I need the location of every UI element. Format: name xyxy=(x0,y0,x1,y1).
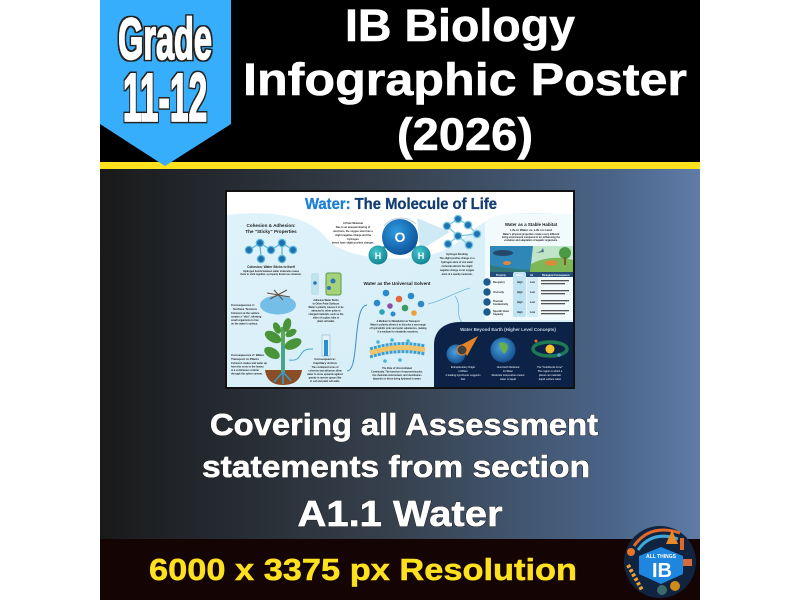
habitat table: High xyxy=(517,281,523,284)
text: hydrogen bonding: molecule attracts the slight xyxy=(442,265,473,268)
section: universal solvent xyxy=(364,281,431,380)
grade range: 11-12 xyxy=(123,59,207,136)
section: water beyond earth: its Water xyxy=(503,370,513,373)
coverage text: statements from section xyxy=(202,449,590,484)
title: Infographic Poster xyxy=(243,54,687,105)
icon: adhesion tube and cell xyxy=(311,273,341,295)
habitat table: Low xyxy=(530,291,535,294)
habitat table: Low xyxy=(530,311,535,314)
section: consequences and plant: from the roots to the leaves xyxy=(231,366,264,368)
habitat table: Conductivity xyxy=(493,303,509,306)
section: stable habitat xyxy=(483,214,573,320)
habitat table: High xyxy=(517,311,523,314)
icon: solvent molecules xyxy=(374,290,424,316)
habitat scene xyxy=(490,246,573,273)
section: consequences and plant: Adhesive Water Sticks xyxy=(313,299,339,302)
habitat table: Viscosity xyxy=(493,291,505,294)
section: consequences and plant: plant cell walls. xyxy=(317,320,335,323)
section: cohesion and adhesion: The "Sticky" Properties xyxy=(245,229,297,234)
section: water beyond earth: planet can maintain xyxy=(539,374,562,377)
icon: membrane xyxy=(370,338,425,363)
grade label: Grade xyxy=(118,6,212,71)
text: a polar molecule: hydrogen xyxy=(347,238,359,241)
section: water beyond earth: Extraplanetary Origin xyxy=(451,366,476,369)
section: water beyond earth xyxy=(434,322,573,387)
text: a polar molecule: A Polar Molecule xyxy=(343,222,364,225)
text: hydrogen bonding: negative charge on an oxygen xyxy=(440,269,475,272)
section: consequences and plant: small organisms to live xyxy=(231,319,259,322)
habitat table xyxy=(483,272,573,317)
section: water beyond earth: water is liquid xyxy=(500,378,517,381)
section: water beyond earth: that xyxy=(461,378,465,381)
section: consequences and plant: The combined forces of xyxy=(312,366,339,369)
habitat table: Thermal xyxy=(493,300,503,303)
icon: hydrogen bonded cluster xyxy=(443,215,481,249)
coverage text xyxy=(202,407,598,534)
section: universal solvent: the chemical environment, and membranes xyxy=(372,374,422,377)
yellow divider xyxy=(100,162,700,169)
section: water beyond earth: The region in which a xyxy=(538,370,563,373)
habitat table: Capacity xyxy=(493,313,504,316)
text: hydrogen bonding: hydrogen atom of one water xyxy=(441,261,473,264)
text: a polar molecule xyxy=(332,222,374,244)
section: universal solvent: Community. The function of macromolecules, xyxy=(371,370,423,374)
section: consequences and plant: creates a "skin", allowing xyxy=(231,316,262,318)
arrow: plant to capillary xyxy=(289,349,313,360)
section: cohesion and adhesion: Cohesion: Water Sticks to Itself xyxy=(247,265,296,269)
section: consequences and plant: Transport in Plants xyxy=(231,357,259,361)
section: stable habitat: living environment compared to air, influencing the xyxy=(502,236,561,239)
section: universal solvent: A Medium for Metabolism & Transport xyxy=(376,320,420,323)
section: universal solvent: depends on these being hydrated in water. xyxy=(373,378,422,380)
grade ribbon xyxy=(100,0,231,166)
section: consequences and plant: Consequence: xyxy=(314,357,336,361)
section: consequences and plant: on the water's surface. xyxy=(231,322,258,326)
text: a polar molecule: atoms have slight positive charges. xyxy=(332,242,374,244)
habitat table: Air xyxy=(530,274,533,277)
section: consequences and plant: gravity in narrow spaces like xyxy=(309,376,342,380)
section: universal solvent: The Role of Unconstituted xyxy=(382,367,412,370)
section: cohesion and adhesion: Cohesion & Adhesion: xyxy=(246,223,296,228)
section: consequences and plant: cohesion and adhesion allow xyxy=(308,370,342,372)
section: stable habitat: evolution and adaptation of aquatic organisms. xyxy=(504,239,558,242)
section: water beyond earth: A leading hypothesis suggests xyxy=(445,374,481,377)
habitat table: Biological Consequence xyxy=(542,274,570,277)
section: consequences and plant: to Other Polar Surfaces xyxy=(313,302,340,306)
section: consequences and plant: Consequence 2: Water xyxy=(231,353,265,357)
poster preview xyxy=(225,190,575,389)
icon: water strider xyxy=(260,290,296,314)
habitat table: Low xyxy=(530,281,535,284)
section: universal solvent: of hydrophilic ionic and polar substances, making xyxy=(370,327,427,330)
section: consequences and plant: sides of a glass tube or xyxy=(313,316,339,320)
section: stable habitat: Water's physical properties create a very different xyxy=(503,233,559,236)
background panel xyxy=(100,0,700,600)
logo badge xyxy=(624,526,696,598)
section: consequences and plant: in soil and plant cell walls. xyxy=(310,380,340,383)
habitat table: Buoyancy xyxy=(493,281,506,284)
icon: water molecule chain xyxy=(245,239,297,263)
habitat table: Property xyxy=(496,274,507,277)
section: consequences and plant: water to move upwards against xyxy=(307,373,343,376)
icon: capillary tube xyxy=(322,335,330,356)
coverage text: Covering all Assessment xyxy=(210,407,598,442)
section: consequences and plant: Capillary Action xyxy=(313,361,337,365)
section: consequences and plant: through the xylem system. xyxy=(231,372,263,376)
arrow: capillary to solvent xyxy=(347,305,367,371)
text: a polar molecule: Due to an unequal sharing of xyxy=(336,226,370,229)
section: cohesion and adhesion xyxy=(240,223,302,276)
footer bar xyxy=(100,539,700,600)
section: consequences and plant: in a continuous column xyxy=(231,369,260,372)
section: consequences and plant: charged materials, such as the xyxy=(309,313,344,316)
section: consequences and plant: attracted to other polar or xyxy=(311,310,341,312)
icon: polar water molecule: O xyxy=(395,229,406,245)
section: consequences and plant: Surface Tension xyxy=(233,307,257,311)
header band xyxy=(100,0,700,162)
text: hydrogen bonding: The slight positive charge on a xyxy=(439,257,475,260)
section: cohesion and adhesion: Hydrogen bonds between water molecules cause xyxy=(243,270,300,273)
title: IB Biology xyxy=(345,0,575,51)
logo badge: ALL THINGS xyxy=(646,554,677,560)
section: stable habitat: Water as a Stable Habitat xyxy=(505,222,558,227)
icon: polar water molecule: H xyxy=(375,251,381,261)
icon: goldilocks orbit xyxy=(533,340,567,357)
section: consequences and plant: Water's polarity causes it to be xyxy=(308,306,344,309)
coverage text: A1.1 Water xyxy=(298,493,502,534)
habitat table: High xyxy=(517,301,523,304)
title: (2026) xyxy=(397,109,533,160)
poster title: Water: The Molecule of Life xyxy=(305,196,497,213)
section: universal solvent: Water's polarity allows it to dissolve a vast range xyxy=(370,324,426,326)
section: water beyond earth: The "Goldilocks Zone" xyxy=(537,366,563,369)
icon: comet impact xyxy=(446,336,478,364)
text: hydrogen bonding: atom of a nearby molecule, xyxy=(442,273,473,276)
habitat table: Water xyxy=(516,274,523,277)
section: water beyond earth: liquid surface water xyxy=(539,378,561,381)
arrow: solvent curves xyxy=(428,288,470,322)
title xyxy=(243,0,687,160)
section: universal solvent: it a medium for metabolic reactions. xyxy=(378,330,419,334)
text: a polar molecule: electrons, the oxygen atom has a xyxy=(333,230,373,233)
section: water beyond earth: How Earth Retained xyxy=(497,366,520,369)
text: a polar molecule: slight negative charge and the xyxy=(335,234,372,237)
icon: earth xyxy=(490,338,516,362)
section: cohesion and adhesion: them to stick together, a property known as cohesion. xyxy=(240,273,302,276)
section: universal solvent: Water as the Universal Solvent xyxy=(364,281,431,286)
section: water beyond earth: Water Beyond Earth (Higher Level Concepts) xyxy=(460,327,556,332)
habitat table: Specific Heat xyxy=(493,310,509,313)
logo badge: IB xyxy=(652,560,672,582)
habitat table: Low xyxy=(530,301,535,304)
icon: polar water molecule: H xyxy=(418,251,424,261)
icon: plant xyxy=(262,317,303,385)
section: consequences and plant: Consequence 1: xyxy=(231,303,255,307)
section: water beyond earth: Moderate temperature meant xyxy=(492,374,525,377)
resolution text: 6000 x 3375 px Resolution xyxy=(149,552,577,587)
habitat table: High xyxy=(517,291,523,294)
section: consequences and plant: Cohesion makes and water up xyxy=(231,362,267,365)
section: consequences and plant xyxy=(231,273,367,385)
section: consequences and plant: Cohesion at the surface xyxy=(231,312,260,315)
section: water beyond earth: of Water xyxy=(458,370,468,373)
text: hydrogen bonding xyxy=(439,253,475,276)
icon: polar water molecule xyxy=(368,218,450,264)
text: hydrogen bonding: Hydrogen Bonding xyxy=(446,253,468,256)
section: stable habitat: Life in Water vs. Life on Land xyxy=(510,228,552,232)
